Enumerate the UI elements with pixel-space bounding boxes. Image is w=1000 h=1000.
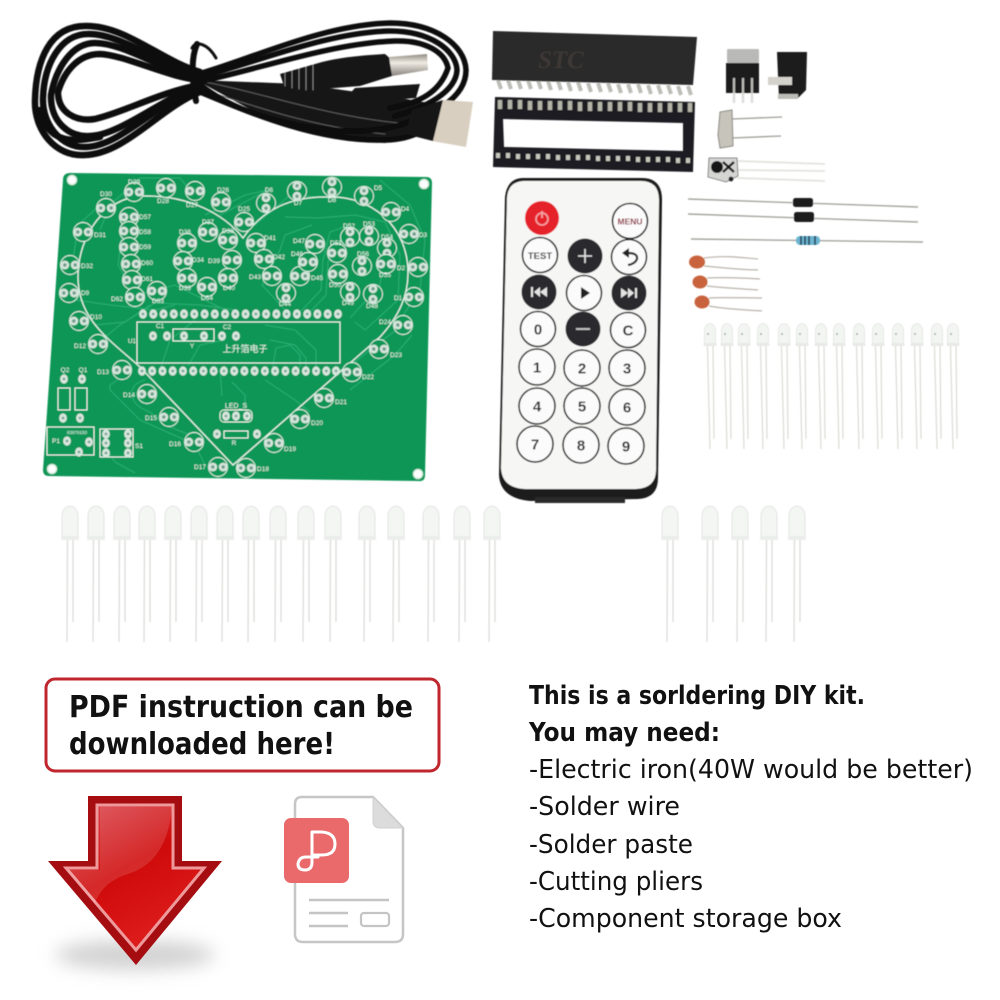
silkscreen labels: D45 bbox=[311, 275, 323, 282]
socket bottom contacts bbox=[498, 153, 688, 163]
silkscreen labels: D44 bbox=[279, 301, 291, 308]
crystal and capacitor footprints bbox=[149, 329, 240, 341]
silkscreen labels: D23 bbox=[390, 352, 402, 359]
silkscreen labels: D43 bbox=[249, 274, 261, 281]
silkscreen labels: S1 bbox=[135, 443, 143, 450]
silkscreen labels: D57 bbox=[139, 214, 151, 221]
silkscreen labels: D36 bbox=[179, 229, 191, 236]
resistor bbox=[691, 236, 923, 245]
power cable bbox=[35, 23, 473, 155]
silkscreen labels: D59 bbox=[139, 244, 151, 251]
silkscreen labels: D7 bbox=[294, 200, 303, 207]
remote bottom edge bbox=[535, 497, 625, 503]
diodes bbox=[688, 198, 918, 222]
callout: PDF download bbox=[46, 679, 439, 771]
infrared receiver bbox=[708, 158, 825, 182]
P1 connector footprint bbox=[47, 427, 94, 457]
text block: tools needed: -Solder wire bbox=[529, 792, 680, 822]
silkscreen labels: D34 bbox=[192, 257, 204, 264]
C button: C bbox=[623, 322, 634, 340]
socket frame bbox=[493, 97, 695, 172]
silkscreen labels: D60 bbox=[141, 260, 153, 267]
silkscreen labels: D51 bbox=[330, 240, 342, 247]
silkscreen labels: D42 bbox=[273, 254, 285, 261]
number button labels bbox=[531, 360, 631, 456]
number button labels: 1 bbox=[533, 360, 541, 376]
text block: tools needed: -Electric iron(40W would be better) bbox=[529, 755, 973, 785]
zero button bbox=[520, 312, 556, 346]
silkscreen labels: D1 bbox=[394, 295, 403, 302]
silkscreen labels: D41 bbox=[264, 235, 276, 242]
IC footprint bbox=[137, 309, 342, 376]
copper traces bbox=[73, 178, 425, 473]
silkscreen labels: D2 bbox=[397, 265, 406, 272]
zero button: 0 bbox=[534, 322, 542, 338]
socket top contacts bbox=[500, 100, 690, 112]
silkscreen labels: D28 bbox=[157, 198, 169, 205]
silkscreen labels: D24 bbox=[379, 319, 391, 326]
silkscreen labels: D55 bbox=[379, 272, 391, 279]
silkscreen labels: 83879150 bbox=[67, 430, 88, 435]
silkscreen labels: D21 bbox=[335, 399, 347, 406]
silkscreen labels: R bbox=[232, 440, 237, 447]
silkscreen labels bbox=[52, 179, 428, 473]
silkscreen labels: D61 bbox=[141, 276, 153, 283]
silkscreen labels: D33 bbox=[179, 285, 191, 292]
silkscreen labels: D16 bbox=[169, 441, 181, 448]
number buttons bbox=[517, 349, 645, 464]
document text lines bbox=[309, 900, 389, 926]
power button bbox=[525, 201, 559, 235]
callout: PDF download: PDF instruction can be bbox=[69, 690, 413, 725]
LED_S and resistor footprints bbox=[213, 410, 261, 439]
number button labels: 8 bbox=[577, 438, 585, 454]
silkscreen labels: D20 bbox=[311, 420, 323, 427]
upper and outer cable strands bbox=[195, 23, 466, 140]
icon: red download arrow bbox=[48, 796, 222, 970]
text block: tools needed: -Component storage box bbox=[529, 904, 842, 934]
silkscreen labels: U1 bbox=[128, 338, 137, 345]
number button labels: 4 bbox=[533, 398, 542, 416]
number button labels: 2 bbox=[578, 360, 586, 378]
S1 switch footprint bbox=[100, 429, 133, 458]
transistor footprints bbox=[58, 374, 87, 423]
back button bbox=[612, 240, 646, 274]
silkscreen labels: D15 bbox=[145, 415, 157, 422]
IC socket bbox=[493, 97, 695, 172]
silkscreen labels: D25 bbox=[238, 206, 250, 213]
silkscreen labels: D27 bbox=[186, 202, 198, 209]
plus button bbox=[568, 238, 602, 274]
previous button bbox=[522, 274, 556, 310]
silkscreen labels: D52 bbox=[343, 223, 355, 230]
silkscreen labels: D48 bbox=[366, 303, 378, 310]
silkscreen labels: D49 bbox=[342, 300, 354, 307]
small LED row bbox=[704, 324, 960, 449]
silkscreen labels: D26 bbox=[217, 187, 229, 194]
menu button: MENU bbox=[617, 216, 643, 226]
silkscreen labels: D37 bbox=[202, 219, 214, 226]
text block: tools needed: You may need: bbox=[528, 718, 720, 748]
next button bbox=[612, 276, 646, 310]
silkscreen labels: D9 bbox=[81, 290, 90, 297]
play button bbox=[566, 276, 602, 310]
silkscreen labels: D18 bbox=[257, 466, 269, 473]
remote casing bbox=[499, 178, 662, 501]
silkscreen labels: D46 bbox=[291, 251, 303, 258]
silkscreen labels: D3 bbox=[419, 232, 428, 239]
silkscreen labels: 上升箔电子 bbox=[222, 343, 268, 354]
chip marking: STC bbox=[538, 47, 584, 74]
silkscreen labels: Q1 bbox=[79, 367, 88, 374]
crystal oscillator bbox=[718, 110, 782, 148]
silkscreen labels: D14 bbox=[123, 392, 135, 399]
silkscreen labels: P1 bbox=[52, 438, 60, 445]
number button labels: 6 bbox=[623, 400, 631, 416]
text block: tools needed bbox=[528, 681, 973, 934]
heart outline LEDs bbox=[59, 177, 428, 478]
silkscreen labels: D64 bbox=[201, 295, 213, 302]
silkscreen labels: D29 bbox=[128, 179, 140, 186]
left cable loop bbox=[35, 26, 200, 155]
silkscreen labels: D5 bbox=[374, 185, 383, 192]
silkscreen labels: D38 bbox=[222, 228, 234, 235]
red logo tile bbox=[284, 818, 349, 883]
silkscreen labels: LED_S bbox=[225, 403, 247, 410]
DC power jack bbox=[768, 52, 807, 99]
cable tie bbox=[193, 44, 197, 101]
text block: tools needed: This is a sorldering DIY kit. bbox=[529, 681, 865, 711]
callout: PDF download: downloaded here! bbox=[69, 727, 335, 762]
chip pins bbox=[498, 80, 691, 95]
number button labels: 3 bbox=[623, 360, 631, 378]
microcontroller chip bbox=[492, 31, 697, 95]
icon: PDF document bbox=[284, 797, 403, 942]
silkscreen labels: C2 bbox=[223, 324, 232, 331]
silkscreen labels: D13 bbox=[97, 369, 109, 376]
large LED row right bbox=[661, 506, 806, 642]
silkscreen labels: D53 bbox=[363, 221, 375, 228]
silkscreen labels: D22 bbox=[362, 374, 374, 381]
silkscreen labels: Y bbox=[190, 343, 195, 350]
silkscreen labels: D4 bbox=[401, 206, 410, 213]
C button bbox=[610, 312, 646, 348]
large LED row left bbox=[61, 506, 501, 642]
silkscreen labels: D50 bbox=[329, 282, 341, 289]
chip body bbox=[492, 31, 697, 85]
lower cable bundle bbox=[196, 80, 440, 143]
remote face bbox=[501, 181, 659, 489]
silkscreen labels: D47 bbox=[293, 238, 305, 245]
heart outline bbox=[78, 196, 408, 465]
IR remote control bbox=[499, 178, 662, 503]
minus button bbox=[566, 312, 600, 346]
silkscreen labels: D63 bbox=[152, 298, 164, 305]
barrel plug bbox=[280, 54, 428, 104]
number button labels: 7 bbox=[531, 436, 539, 454]
test button bbox=[522, 238, 558, 272]
silkscreen labels: D10 bbox=[90, 314, 102, 321]
silkscreen labels: D30 bbox=[100, 191, 112, 198]
silkscreen labels: D58 bbox=[139, 229, 151, 236]
silkscreen labels: D12 bbox=[74, 343, 86, 350]
silkscreen labels: D39 bbox=[208, 258, 220, 265]
text block: tools needed: -Solder paste bbox=[529, 830, 693, 860]
test button: TEST bbox=[528, 251, 552, 262]
silkscreen labels: D17 bbox=[194, 464, 206, 471]
silkscreen labels: D62 bbox=[111, 296, 123, 303]
menu button bbox=[612, 204, 648, 238]
silkscreen labels: D6 bbox=[265, 187, 274, 194]
voltage regulator bbox=[726, 49, 759, 103]
ceramic capacitors bbox=[689, 256, 762, 311]
silkscreen labels: D31 bbox=[94, 232, 106, 239]
silkscreen labels: D40 bbox=[223, 285, 235, 292]
silkscreen labels: D19 bbox=[284, 446, 296, 453]
silkscreen labels: D8 bbox=[328, 197, 337, 204]
board substrate bbox=[43, 173, 432, 481]
silkscreen labels: D54 bbox=[381, 234, 393, 241]
silkscreen labels: D32 bbox=[81, 263, 93, 270]
mounting holes bbox=[48, 176, 428, 478]
USB plug bbox=[405, 100, 473, 147]
silkscreen labels: D56 bbox=[357, 251, 369, 258]
number button labels: 5 bbox=[578, 398, 586, 416]
text block: tools needed: -Cutting pliers bbox=[529, 867, 703, 897]
number button labels: 9 bbox=[622, 438, 630, 456]
inner heart LEDs bbox=[119, 208, 397, 306]
PCB heart board bbox=[43, 173, 432, 481]
silkscreen labels: Q2 bbox=[61, 367, 70, 374]
silkscreen labels: C1 bbox=[156, 323, 165, 330]
